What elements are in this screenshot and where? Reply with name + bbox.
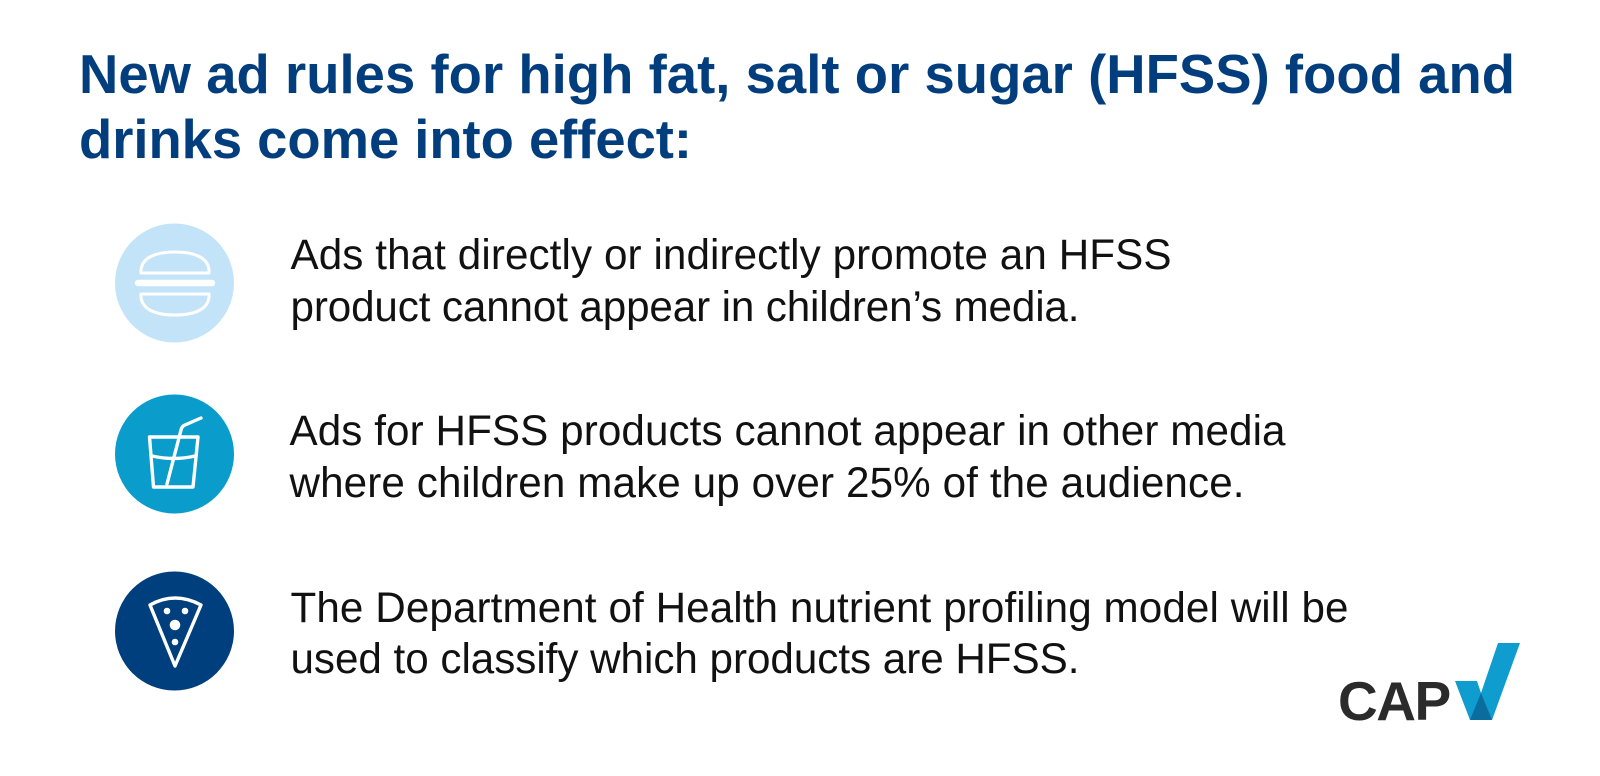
text: children's media rule: product cannot appear in children’s media. [290, 283, 1080, 330]
title: drinks come into effect: [79, 109, 692, 170]
text: 25% audience rule: Ads for HFSS products cannot appear in other media [290, 407, 1286, 454]
title [79, 44, 1515, 170]
logo: CAP: CAP [1338, 670, 1450, 732]
text: children's media rule [290, 231, 1172, 330]
text: children's media rule: Ads that directly or indirectly promote an HFSS [290, 231, 1172, 278]
title: New ad rules for high fat, salt or sugar (HFSS) food and [79, 44, 1515, 105]
icon: burger [115, 224, 234, 342]
icon: pizza [115, 572, 234, 690]
text: 25% audience rule [288, 407, 1286, 506]
text: nutrient profiling rule: The Department of Health nutrient profiling model will be [290, 584, 1348, 631]
text: 25% audience rule: where children make up over 25% of the audience. [288, 459, 1244, 506]
text: nutrient profiling rule: used to classify which products are HFSS. [290, 635, 1080, 682]
logo: CAP [1338, 643, 1520, 732]
text: nutrient profiling rule [290, 584, 1348, 682]
icon: drink [115, 394, 234, 514]
